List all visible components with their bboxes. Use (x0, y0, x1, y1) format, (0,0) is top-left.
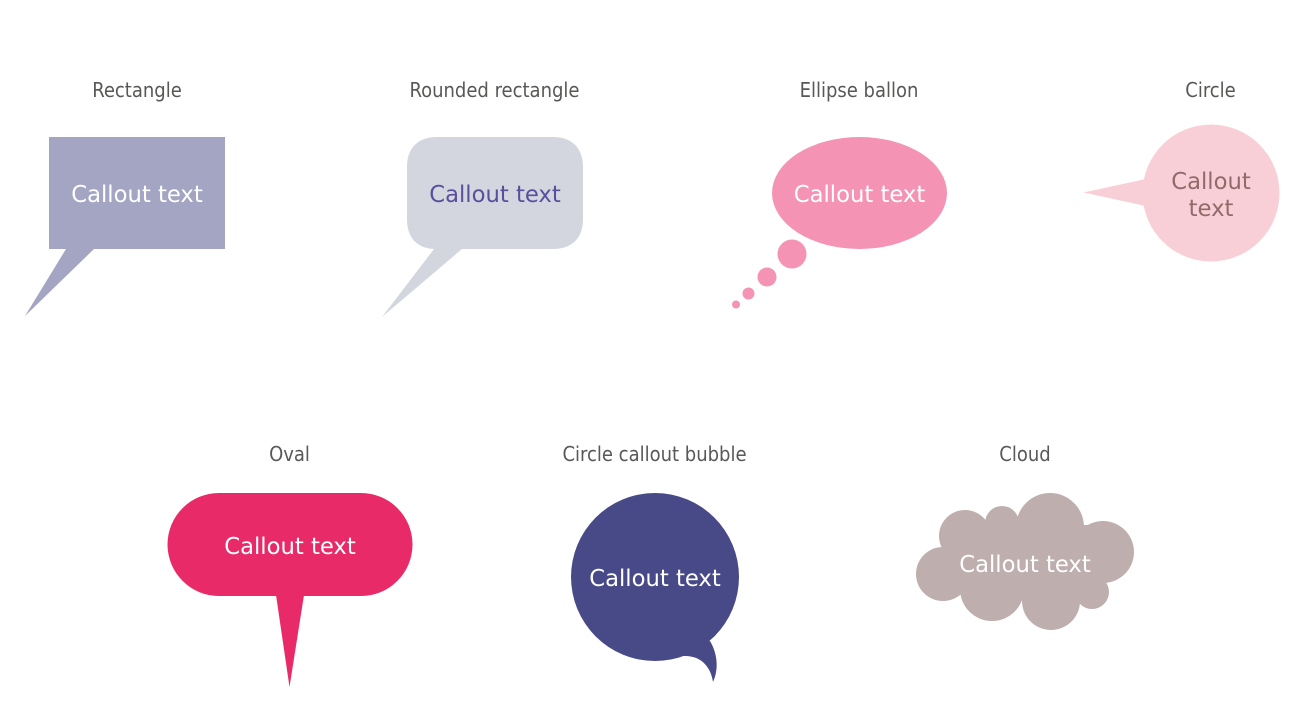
callout: rectangle (25, 137, 225, 316)
callout: oval (168, 493, 412, 687)
callout: rounded rectangle: Callout text (429, 182, 561, 208)
callout: rounded rectangle (382, 137, 583, 317)
callout: ellipse balloon: Callout text (794, 182, 925, 208)
callout: circle bubble: Callout text (589, 566, 721, 592)
heading: Rounded rectangle: Rounded rectangle (410, 78, 579, 102)
callout: oval: Callout text (224, 534, 356, 560)
callout: circle: text (1189, 196, 1233, 222)
callout: cloud: Callout text (959, 552, 1091, 578)
heading: Ellipse ballon: Ellipse ballon (800, 78, 918, 102)
heading: Oval: Oval (269, 442, 310, 466)
callout: cloud (916, 493, 1134, 630)
heading: Rectangle: Rectangle (92, 78, 182, 102)
callout: circle (1084, 124, 1280, 262)
callout: circle bubble (571, 493, 739, 682)
heading: Circle callout bubble: Circle callout bubble (562, 442, 747, 466)
callout: rectangle: Callout text (71, 182, 203, 208)
callout: circle: Callout (1171, 169, 1251, 195)
heading: Cloud: Cloud (999, 442, 1051, 466)
heading: Circle: Circle (1185, 78, 1236, 102)
callout: ellipse balloon (732, 137, 947, 308)
